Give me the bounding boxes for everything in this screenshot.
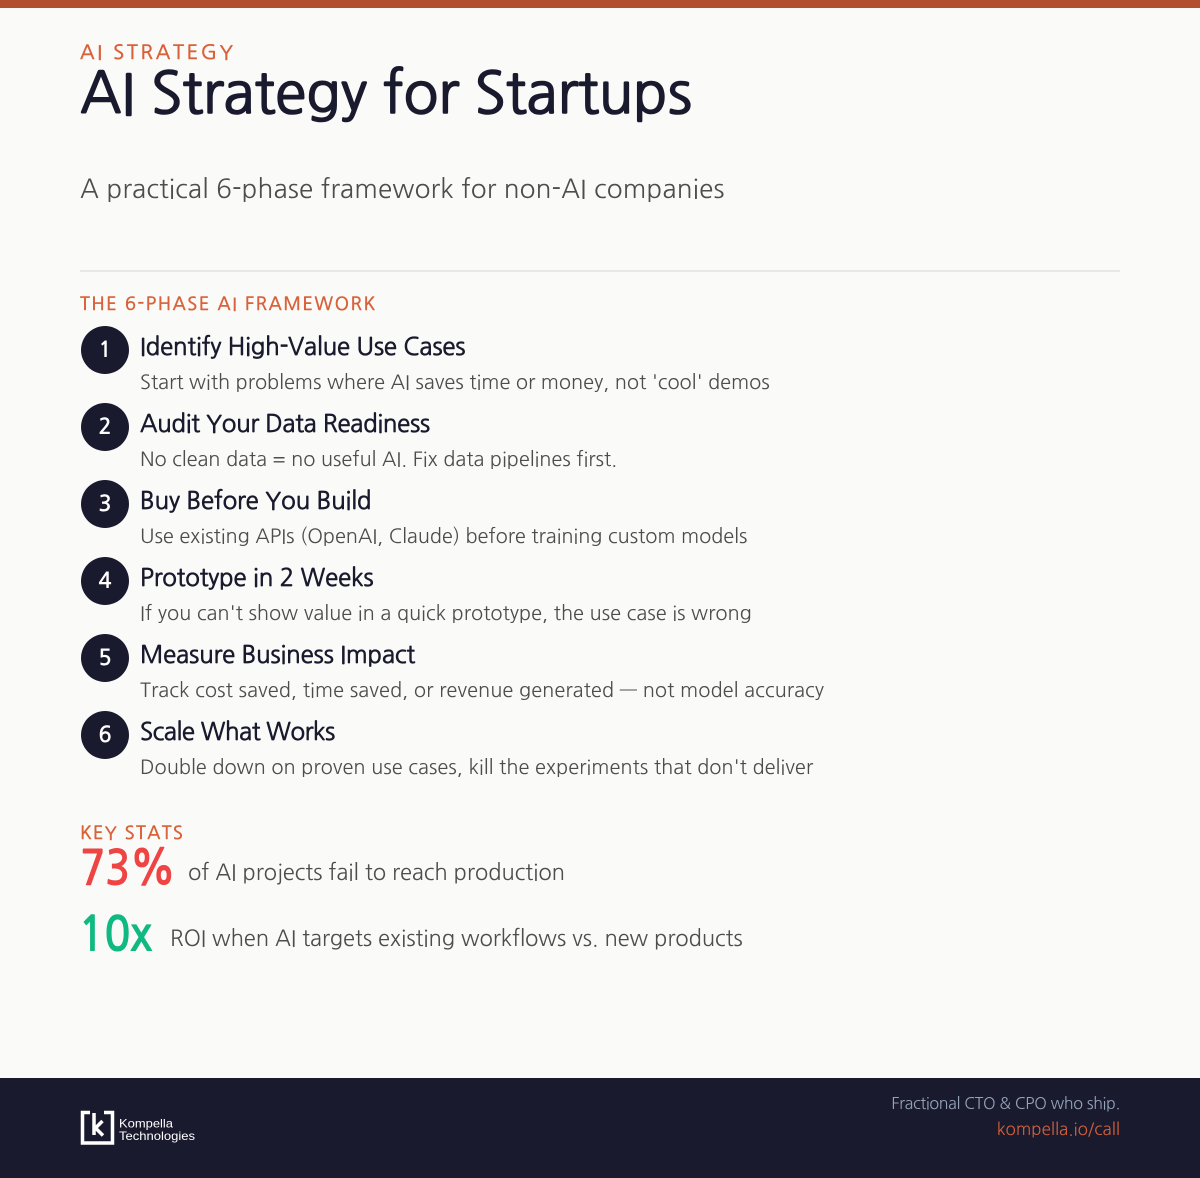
phase 1 heading: Identify High-Value Use Cases bbox=[140, 335, 465, 359]
phase 3 number bbox=[81, 480, 129, 528]
phase 4 number: 4 bbox=[98, 570, 112, 592]
logo: Kompella bbox=[119, 1116, 173, 1130]
phase 4 number bbox=[81, 557, 129, 605]
phase 2 number bbox=[81, 403, 129, 451]
phase 4 heading: Prototype in 2 Weeks bbox=[140, 566, 373, 590]
phase 1 description: Start with problems where AI saves time or money, not 'cool' demos bbox=[140, 372, 770, 392]
phase 3 description: Use existing APIs (OpenAI, Claude) before training custom models bbox=[140, 526, 747, 546]
phase 2 description: No clean data = no useful AI. Fix data pipelines first. bbox=[140, 449, 617, 469]
phase 6 description: Double down on proven use cases, kill the experiments that don't deliver bbox=[140, 757, 813, 777]
stat 73% text: of AI projects fail to reach production bbox=[188, 862, 565, 884]
phase 2 heading: Audit Your Data Readiness bbox=[140, 412, 430, 436]
phase 5 number bbox=[81, 634, 129, 682]
eyebrow label: AI STRATEGY bbox=[80, 42, 236, 62]
phase 5 heading: Measure Business Impact bbox=[140, 643, 415, 667]
phase 6 heading: Scale What Works bbox=[140, 720, 335, 744]
stat 10x text: ROI when AI targets existing workflows vs. new products bbox=[170, 928, 743, 950]
footer bbox=[0, 1078, 1200, 1178]
phase 2 number: 2 bbox=[98, 416, 112, 438]
phase 1 number: 1 bbox=[98, 339, 112, 361]
phase 6 number: 6 bbox=[98, 724, 112, 746]
stat 10x value: 10x bbox=[78, 912, 152, 959]
section heading: key stats: KEY STATS bbox=[80, 824, 184, 842]
phase 3 heading: Buy Before You Build bbox=[140, 489, 371, 513]
logo bbox=[80, 1110, 195, 1145]
logo: Technologies bbox=[119, 1129, 195, 1143]
phase 5 number: 5 bbox=[98, 647, 112, 669]
phase 5 description: Track cost saved, time saved, or revenue generated — not model accuracy bbox=[140, 680, 824, 700]
phase 4 description: If you can't show value in a quick prototype, the use case is wrong bbox=[140, 603, 752, 623]
phase 6 number bbox=[81, 711, 129, 759]
phase list bbox=[81, 326, 824, 777]
top accent bar bbox=[0, 0, 1200, 8]
phase 3 number: 3 bbox=[98, 493, 112, 515]
subtitle: A practical 6-phase framework for non-AI companies bbox=[80, 176, 725, 202]
section heading: framework: THE 6-PHASE AI FRAMEWORK bbox=[80, 295, 377, 313]
tagline: Fractional CTO & CPO who ship. bbox=[891, 1096, 1120, 1112]
title: AI Strategy for Startups bbox=[80, 65, 692, 122]
phase 1 number bbox=[81, 326, 129, 374]
footer link: kompella.io/call bbox=[997, 1121, 1120, 1138]
stat 73% value: 73% bbox=[80, 846, 175, 893]
